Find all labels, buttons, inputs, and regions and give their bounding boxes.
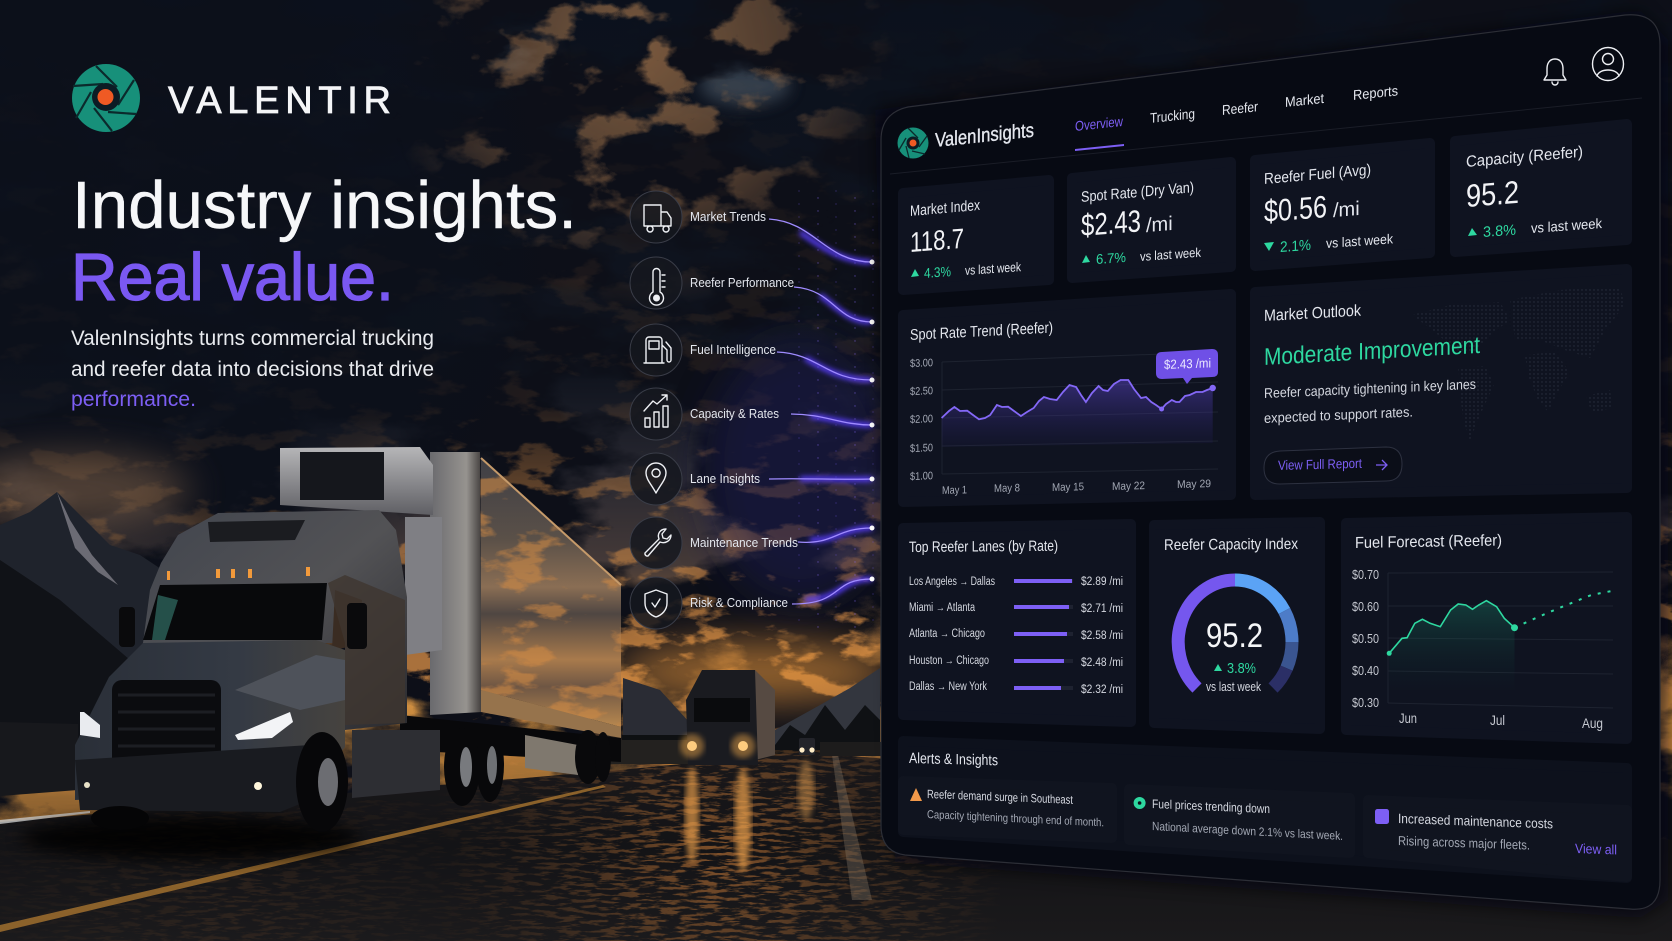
navigation tabs: Reports [1353,82,1398,103]
y axis labels: $0.40 [1352,663,1379,678]
alert: reefer demand: Reefer demand surge in Southeast [927,787,1074,807]
intro paragraph: performance. [71,388,196,411]
background: mountains [0,492,880,755]
panel: Alerts & Insights: Alerts & Insights [909,750,998,769]
KPI card: Spot Rate: Spot Rate (Dry Van) [1081,179,1194,206]
panel: Market Outlook: expected to support rates. [1264,404,1413,426]
y axis labels: $1.50 [910,442,933,455]
y axis labels: $0.50 [1352,631,1379,646]
navigation tabs: Reefer [1222,98,1258,118]
navigation tabs: Trucking [1150,105,1195,126]
dotted world map [1412,287,1625,440]
KPI card: Capacity: Capacity (Reefer) [1466,143,1583,171]
x axis labels: Jun [1399,711,1417,726]
feature: Lane Insights: Lane Insights [690,472,760,486]
background: wet road [0,722,1672,941]
alert: maintenance costs: View all [1575,841,1617,857]
feature: Risk & Compliance: Risk & Compliance [690,596,788,610]
KPI card: Capacity: 95.2 [1466,174,1519,214]
chart panel: Spot Rate Trend: Spot Rate Trend (Reefer) [910,320,1053,344]
lane rows: Los Angeles → Dallas [909,576,995,588]
alert: maintenance costs: Rising across major fleets. [1398,833,1530,853]
header [898,48,1624,158]
navigation tabs: Market [1285,90,1324,110]
KPI card: Reefer Fuel: 2.1% [1280,237,1311,256]
button: View Full Report [1264,447,1402,484]
x axis labels: May 15 [1052,481,1084,494]
KPI card: Capacity: vs last week [1531,215,1603,236]
y axis labels: $2.00 [910,413,933,426]
y axis labels: $1.00 [910,470,933,483]
feature: Market Trends [630,191,766,243]
x axis labels: Jul [1490,713,1505,728]
panel: Reefer Capacity Index: vs last week [1206,679,1261,694]
panel: Market Outlook: Moderate Improvement [1264,332,1480,371]
lane rows: Miami → Atlanta [909,602,975,614]
lane rows [909,576,1123,696]
KPI card: Capacity [1455,124,1627,252]
panel: Reefer Capacity Index [1154,522,1320,729]
intro paragraph: and reefer data into decisions that drive [71,358,434,381]
headline line 2: Real value. [71,240,394,315]
panel: Market Outlook: Reefer capacity tightening in key lanes [1264,376,1476,401]
feature: Fuel Intelligence: Fuel Intelligence [690,343,776,357]
y axis labels: $0.70 [1352,567,1379,582]
alert: reefer demand: Capacity tightening through end of month. [927,809,1104,829]
lane rows: Houston → Chicago [909,655,989,667]
area chart [942,380,1216,447]
navigation tabs: Overview [1075,113,1124,134]
KPI card: Reefer Fuel: Reefer Fuel (Avg) [1264,162,1371,188]
KPI card: Market Index: Market Index [910,197,980,220]
panel: Fuel Forecast: Fuel Forecast (Reefer) [1355,532,1502,552]
gauge [1178,580,1292,688]
feature: Maintenance Trends [630,517,798,569]
feature: Reefer Performance: Reefer Performance [690,276,794,290]
icon: user [1592,48,1624,80]
tooltip: $2.43 /mi [1164,355,1211,372]
feature: Capacity & Rates: Capacity & Rates [690,407,779,421]
KPI card: Reefer Fuel: /mi [1333,198,1360,222]
alert: maintenance costs: Increased maintenance costs [1398,811,1553,831]
KPI card: Spot Rate [1072,162,1231,278]
button: View Full Report: View Full Report [1278,456,1362,473]
panel: Fuel Forecast [1346,517,1627,739]
background truck: reefer rig [75,447,621,832]
x axis labels [942,478,1211,497]
KPI card: Spot Rate: vs last week [1140,245,1201,264]
KPI card: Capacity: 3.8% [1483,222,1516,241]
feature: Risk & Compliance [630,577,788,629]
KPI card: Market Index [903,180,1049,290]
KPI card: Reefer Fuel: vs last week [1326,231,1393,251]
dashboard name: ValenInsights [935,120,1034,152]
line chart with dashed forecast [1387,591,1612,690]
panel: Market Outlook [1255,269,1627,495]
alert: fuel prices: National average down 2.1% vs last week. [1152,819,1343,843]
tooltip [1156,349,1218,384]
x axis labels: May 8 [994,482,1020,495]
feature: Lane Insights [630,453,760,505]
lane rows: $2.48 /mi [1081,657,1123,669]
dashboard: ValenInsights [881,15,1660,909]
panel: Reefer Capacity Index: 95.2 [1206,617,1263,655]
intro paragraph [71,327,434,411]
headline [71,168,577,315]
KPI card: Market Index: vs last week [965,259,1021,278]
feature list [630,191,798,629]
alert: fuel prices: Fuel prices trending down [1152,797,1270,816]
lane rows: $2.32 /mi [1081,684,1123,696]
intro paragraph: ValenInsights turns commercial trucking [71,327,434,350]
panel frame [881,15,1660,909]
x axis labels: May 22 [1112,480,1145,493]
lane rows: $2.71 /mi [1081,603,1123,615]
KPI card: Spot Rate: 6.7% [1096,249,1126,267]
panel: Reefer Capacity Index: Reefer Capacity Index [1164,536,1298,554]
lane rows: Atlanta → Chicago [909,628,985,640]
chart panel: Spot Rate Trend [903,294,1231,502]
x axis labels: May 1 [942,484,967,497]
headline line 1: Industry insights. [72,168,577,243]
x axis labels: Aug [1582,716,1603,731]
y axis labels [910,357,933,483]
y axis labels: $2.50 [910,385,933,398]
x axis labels: May 29 [1177,478,1211,491]
navigation tabs [1075,82,1398,151]
feature: Reefer Performance [630,257,794,309]
dashboard logo [898,128,928,158]
icon: bell [1544,59,1566,85]
feature: Maintenance Trends: Maintenance Trends [690,536,798,550]
lane rows: Dallas → New York [909,681,987,693]
panel: Alerts & Insights [903,741,1627,878]
panel: Top Reefer Lanes [903,524,1131,722]
feature: Capacity & Rates [630,388,779,440]
lane rows: $2.58 /mi [1081,630,1123,642]
KPI card: Reefer Fuel [1255,143,1430,266]
y axis labels: $3.00 [910,357,933,370]
alert: reefer demand [903,781,1112,838]
feature: Market Trends: Market Trends [690,210,766,224]
alert: fuel prices [1129,789,1350,853]
KPI card: Reefer Fuel: $0.56 [1264,189,1327,229]
logo wordmark: VALENTIR [168,80,391,122]
background truck: distant rig [680,670,815,765]
panel: Reefer Capacity Index: 3.8% [1227,660,1256,677]
KPI card: Market Index: 4.3% [924,263,951,281]
KPI card: Spot Rate: /mi [1146,213,1173,237]
y axis labels [1352,567,1379,710]
x axis labels [1399,711,1603,731]
chart axes [942,352,1218,474]
chart grid [1388,572,1613,708]
alert: maintenance costs [1368,800,1627,877]
dashboard panel shadow [875,10,1668,918]
logo: Valentir [72,64,391,132]
panel: Market Outlook: Market Outlook [1264,303,1362,325]
glowing data connector lines [769,219,874,604]
y axis labels: $0.30 [1352,695,1379,710]
y axis labels: $0.60 [1352,599,1379,614]
KPI card: Spot Rate: $2.43 [1081,203,1141,243]
panel: Top Reefer Lanes: Top Reefer Lanes (by Rate) [909,538,1058,556]
lane rows: $2.89 /mi [1081,576,1123,588]
logo mark [72,64,140,132]
KPI card: Market Index: 118.7 [910,223,964,258]
feature: Fuel Intelligence [630,324,776,376]
